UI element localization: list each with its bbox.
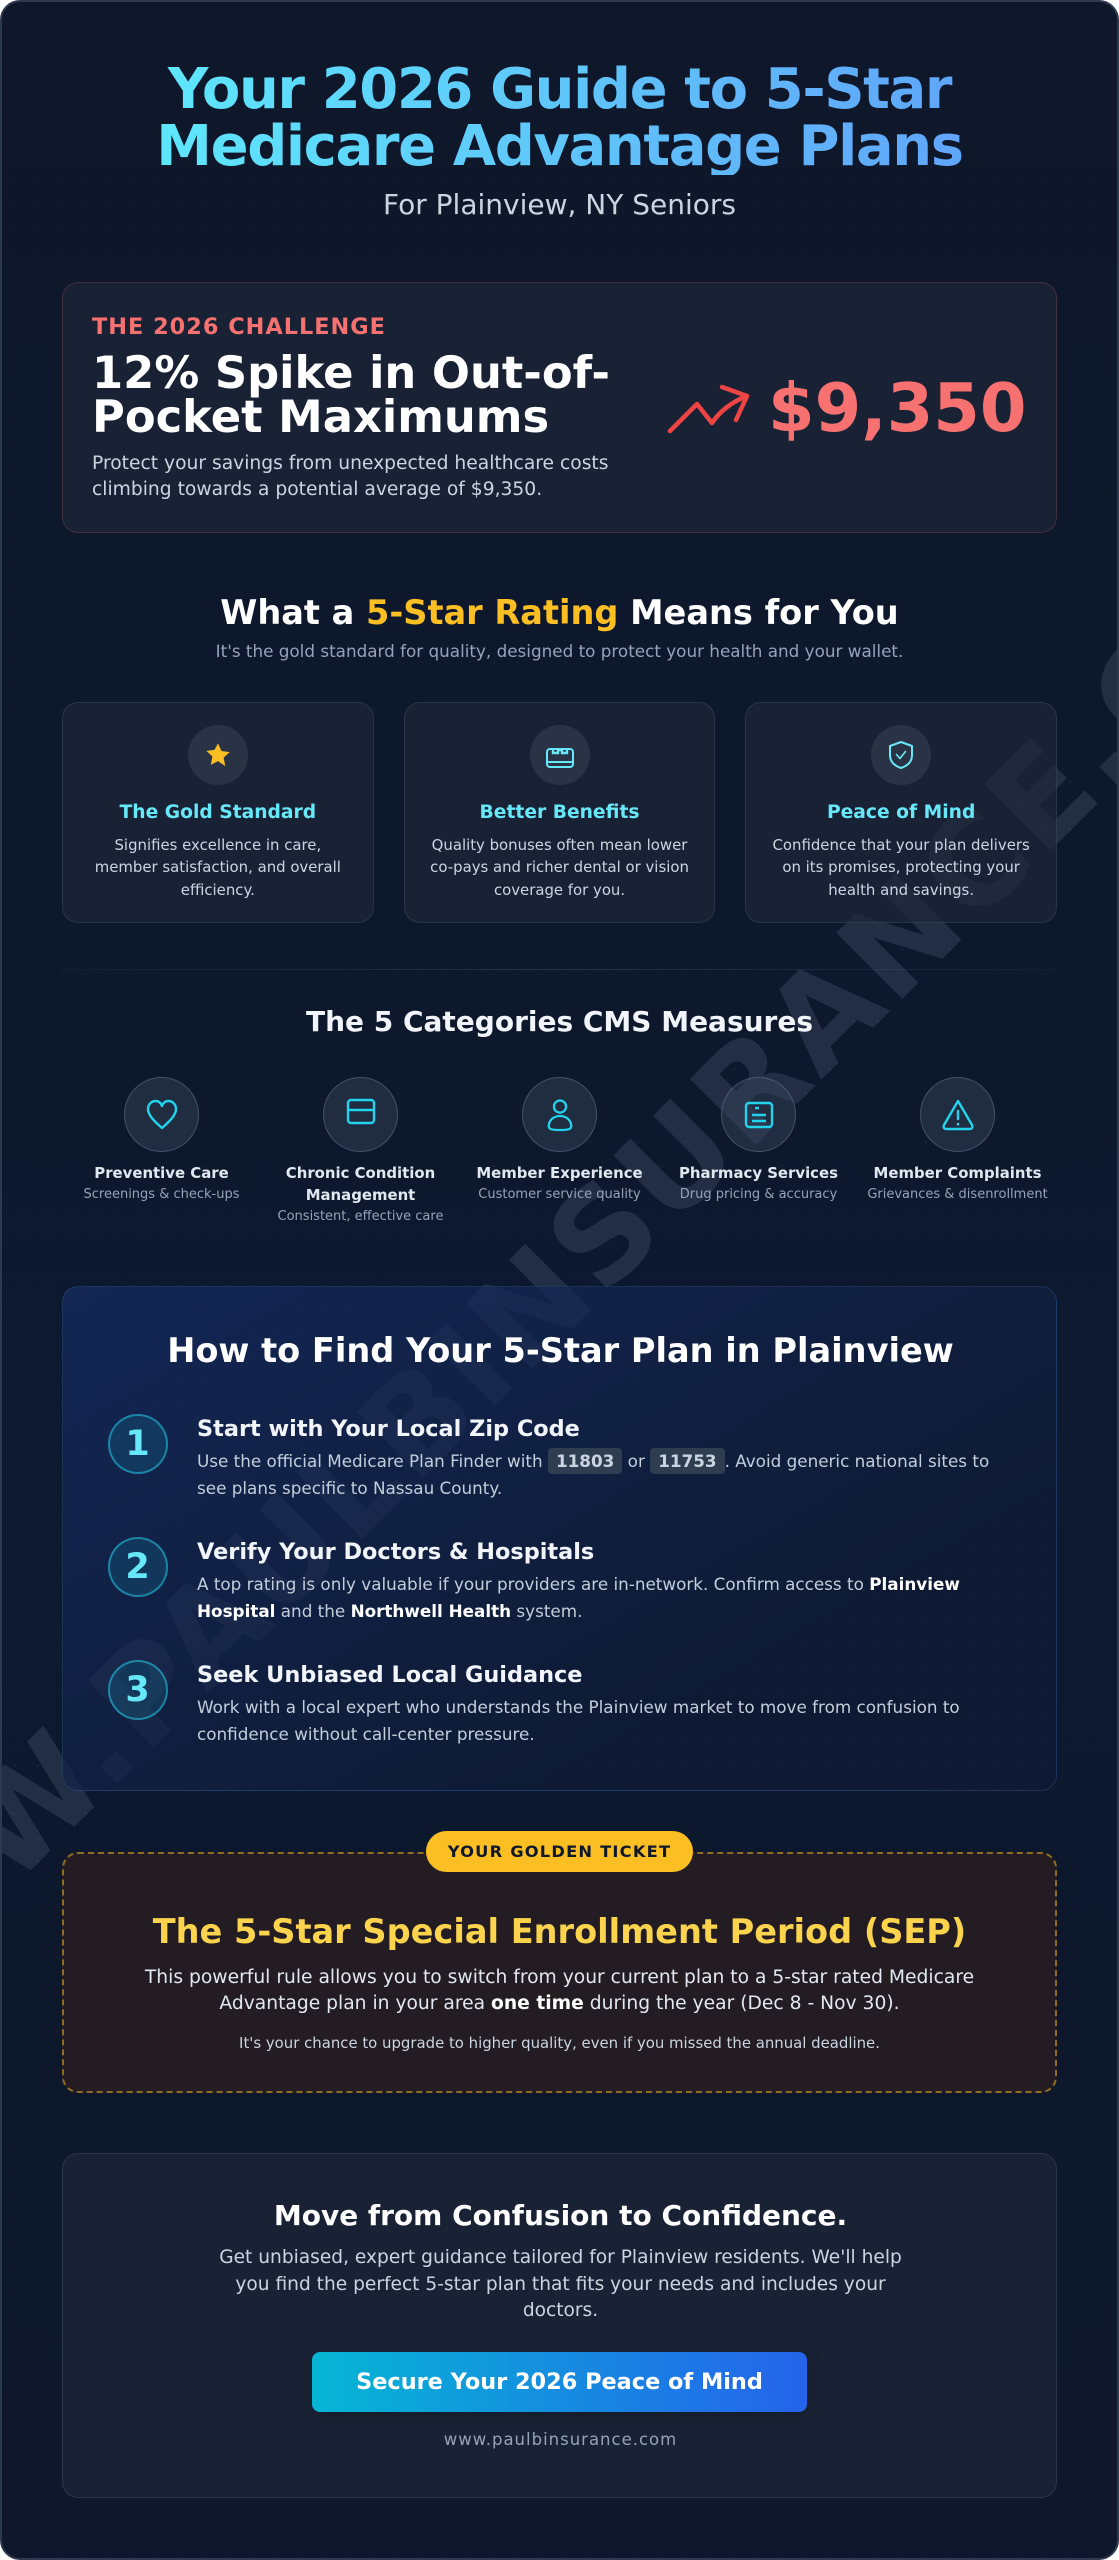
golden ticket heading: The 5-Star Special Enrollment Period (SEP) (153, 1912, 966, 1951)
card text (430, 836, 689, 899)
panel: the gold standard (62, 702, 374, 923)
step 3 text: Work with a local expert who understands the Plainview market to move from confusion to (197, 1697, 960, 1717)
step 3 number (108, 1660, 168, 1720)
card text: coverage for you. (494, 881, 625, 899)
panel: 2026 challenge (62, 282, 1057, 533)
step 3 number: 3 (125, 1670, 150, 1710)
category text: Chronic Condition (286, 1164, 435, 1182)
title (156, 57, 963, 178)
category: member experience (476, 1077, 643, 1202)
category: pharmacy services (679, 1077, 838, 1202)
category: preventive care (84, 1077, 240, 1202)
golden ticket text: This powerful rule allows you to switch from your current plan to a 5-star rated Medicare (145, 1967, 974, 1988)
big number: $9,350 (768, 369, 1027, 447)
golden ticket note: It's your chance to upgrade to higher quality, even if you missed the annual deadline. (239, 2034, 880, 2052)
section heading: 5-star rating: What a 5-Star Rating Means for You (220, 593, 899, 632)
badge: your golden ticket: YOUR GOLDEN TICKET (448, 1842, 671, 1861)
panel: better benefits (404, 702, 715, 923)
card title: Peace of Mind (827, 802, 975, 823)
step 2 text: Hospital and the Northwell Health system. (197, 1601, 582, 1621)
panel heading: How to Find Your 5-Star Plan in Plainview (167, 1331, 954, 1370)
challenge label: THE 2026 CHALLENGE (92, 314, 386, 340)
challenge heading: Pocket Maximums (92, 390, 549, 443)
card text: co-pays and richer dental or vision (430, 858, 689, 876)
step 1 number: 1 (125, 1424, 150, 1464)
category: member experience: Customer service quality (478, 1187, 641, 1202)
golden ticket text (144, 1967, 974, 2014)
title: Your 2026 Guide to 5-Star (168, 57, 951, 122)
step 1 title: Start with Your Local Zip Code (197, 1416, 580, 1442)
button (312, 2352, 807, 2412)
card text: member satisfaction, and overall (95, 858, 341, 876)
panel: golden ticket (62, 1852, 1057, 2093)
card text: efficiency. (181, 881, 255, 899)
call to action text: doctors. (523, 2300, 598, 2321)
call to action text: you find the perfect 5-star plan that fits your needs and includes your (235, 2274, 886, 2295)
step 3 title: Seek Unbiased Local Guidance (197, 1662, 582, 1688)
website: www.paulbinsurance.com (444, 2430, 677, 2449)
step 1 text: see plans specific to Nassau County. (197, 1478, 502, 1498)
card text: on its promises, protecting your (782, 858, 1020, 876)
step 1 text (197, 1448, 989, 1498)
section subheading: It's the gold standard for quality, designed to protect your health and your wallet. (216, 641, 903, 661)
section heading: categories: The 5 Categories CMS Measures (306, 1005, 813, 1038)
icon: person (522, 1077, 597, 1152)
icon: document (721, 1077, 796, 1152)
card text (772, 836, 1030, 899)
step 1 text: Use the official Medicare Plan Finder with or . Avoid generic national sites to (197, 1451, 989, 1471)
category: member complaints (867, 1077, 1048, 1202)
icon: warning triangle (920, 1077, 995, 1152)
category: pharmacy services: Drug pricing & accuracy (680, 1187, 837, 1202)
icon: star (188, 725, 248, 785)
panel: how to find your plan (62, 1286, 1057, 1791)
card text (95, 836, 341, 899)
category: preventive care: Screenings & check-ups (84, 1187, 240, 1202)
icon: card (323, 1077, 398, 1152)
step 3 text (197, 1697, 960, 1744)
icon: benefits box (530, 725, 590, 785)
step 2 number (108, 1537, 168, 1597)
call to action text (219, 2247, 902, 2321)
golden ticket text: Advantage plan in your area one time during the year (Dec 8 - Nov 30). (219, 1993, 900, 2014)
category: chronic condition management (278, 1077, 443, 1224)
category text (286, 1164, 435, 1204)
challenge heading: 12% Spike in Out-of- (92, 346, 610, 399)
challenge heading (92, 346, 610, 443)
step 1 text: 11753 (658, 1451, 717, 1471)
category text: Member Experience (476, 1164, 643, 1182)
call to action text: Get unbiased, expert guidance tailored for Plainview residents. We'll help (219, 2247, 902, 2268)
challenge description (92, 453, 608, 500)
step 1 number (108, 1414, 168, 1474)
step 2 text (197, 1574, 960, 1621)
step 2 text: A top rating is only valuable if your providers are in-network. Confirm access to Plainview (197, 1574, 960, 1594)
subtitle: For Plainview, NY Seniors (383, 188, 736, 221)
challenge description: climbing towards a potential average of $9,350. (92, 479, 542, 500)
category text: Preventive Care (94, 1164, 229, 1182)
badge: your golden ticket (426, 1831, 693, 1872)
panel: peace of mind (745, 702, 1057, 923)
card text: Quality bonuses often mean lower (432, 836, 687, 854)
card title: The Gold Standard (120, 802, 316, 823)
category text: Member Complaints (874, 1164, 1041, 1182)
category: chronic condition management: Consistent, effective care (278, 1209, 443, 1224)
card title: Better Benefits (480, 802, 640, 823)
panel: call to action (62, 2153, 1057, 2498)
card text: Signifies excellence in care, (114, 836, 321, 854)
category text: Management (306, 1186, 415, 1204)
call to action heading: Move from Confusion to Confidence. (274, 2199, 847, 2232)
icon: rising trend arrow (668, 384, 750, 434)
step 2 number: 2 (125, 1547, 150, 1587)
icon: shield check (871, 725, 931, 785)
divider (62, 969, 1057, 970)
step 1 text: 11803 (556, 1451, 614, 1471)
card text: health and savings. (828, 881, 974, 899)
step 2 title: Verify Your Doctors & Hospitals (197, 1539, 594, 1565)
step 3 text: confidence without call-center pressure. (197, 1724, 535, 1744)
category text: Pharmacy Services (679, 1164, 838, 1182)
icon: heart (124, 1077, 199, 1152)
title: Medicare Advantage Plans (156, 114, 963, 178)
button: Secure Your 2026 Peace of Mind (356, 2369, 763, 2395)
card text: Confidence that your plan delivers (772, 836, 1030, 854)
category: member complaints: Grievances & disenrollment (867, 1187, 1048, 1202)
challenge description: Protect your savings from unexpected healthcare costs (92, 453, 608, 474)
